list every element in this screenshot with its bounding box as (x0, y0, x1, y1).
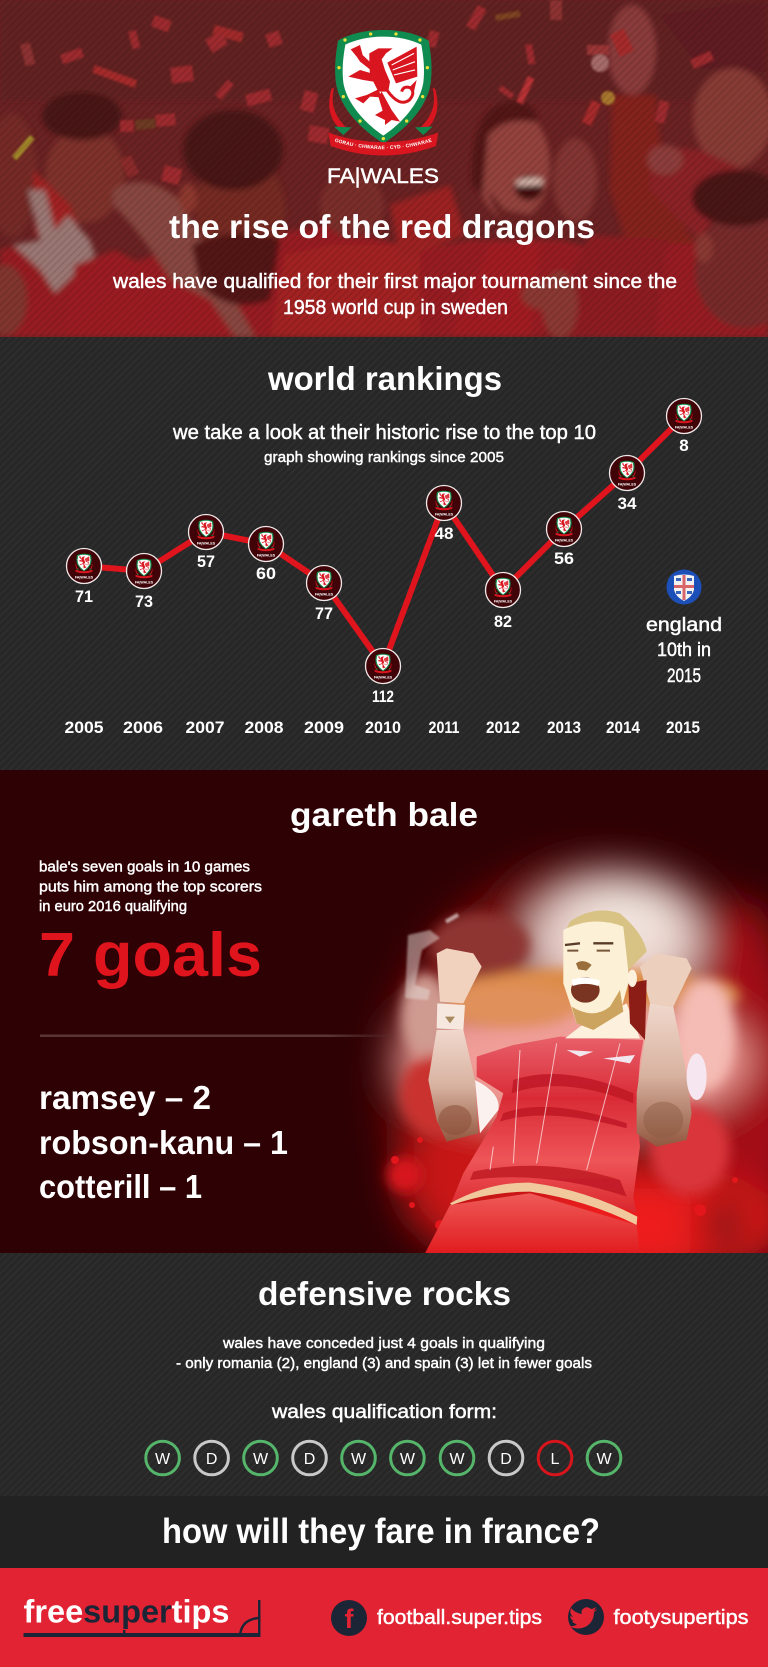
confetti (20, 0, 714, 185)
node 2012: FA|WALES (494, 600, 513, 604)
brand: FA|WALES: FA|WALES (327, 165, 439, 188)
node 2014 (610, 456, 644, 490)
node 2006: FA|WALES (135, 580, 154, 584)
panel: gareth bale (0, 770, 768, 1253)
form badges: W (596, 1451, 612, 1468)
neck and head (565, 1003, 640, 1038)
fine diagonal texture (0, 0, 768, 337)
node 2008: FA|WALES (257, 554, 276, 558)
node 2011 (426, 486, 462, 520)
right arm (637, 1003, 692, 1147)
ranking values (75, 436, 689, 706)
description (39, 858, 262, 915)
ranking values: 34 (618, 494, 637, 513)
node 2014: FA|WALES (618, 482, 637, 486)
shirt (452, 1037, 643, 1213)
england note: 2015 (667, 666, 701, 687)
node 2005 (66, 548, 102, 584)
intro text: we take a look at their historic rise to the top 10 (172, 422, 596, 444)
node 2015: FA|WALES (675, 426, 694, 430)
year axis labels: 2009 (304, 718, 344, 737)
icon: facebook: f (344, 1604, 354, 1634)
description: in euro 2016 qualifying (39, 898, 187, 915)
node 2010: FA|WALES (374, 676, 393, 680)
other scorers: ramsey – 2 (39, 1079, 211, 1116)
year axis labels (64, 718, 700, 737)
form badges: D (304, 1451, 315, 1468)
title: the rise of the red dragons (169, 208, 595, 245)
form badges: W (400, 1451, 416, 1468)
shorts (423, 1193, 640, 1257)
other scorers: cotterill – 1 (39, 1168, 202, 1205)
facebook address: football.super.tips (377, 1607, 542, 1629)
node 2013 (546, 512, 582, 546)
year axis labels: 2005 (64, 718, 104, 737)
photo: blurred players and jerseys (0, 0, 768, 339)
crest: FA Wales (328, 30, 438, 156)
form heading: wales qualification form: (271, 1402, 497, 1423)
subtitle: wales have qualified for their first major tournament since the (112, 271, 677, 293)
waistband (450, 1183, 637, 1225)
heading: defensive rocks: defensive rocks (258, 1275, 511, 1312)
node 2013: FA|WALES (555, 538, 574, 542)
node 2008 (248, 526, 284, 562)
node 2012 (486, 572, 520, 608)
node 2006 (126, 554, 162, 588)
year axis labels: 2015 (666, 718, 700, 737)
ranking values: 8 (679, 436, 689, 455)
form badges: W (155, 1451, 171, 1468)
node 2007: FA|WALES (197, 542, 216, 546)
node 2011: FA|WALES (435, 512, 454, 516)
subtitle: 1958 world cup in sweden (283, 297, 508, 319)
heading: world rankings: world rankings (267, 360, 502, 397)
panel: world rankings (0, 337, 768, 770)
node 2009 (306, 566, 342, 600)
england note (646, 615, 722, 687)
panel: closing question: how will they fare in france? (162, 1512, 600, 1551)
year axis labels: 2014 (606, 718, 640, 737)
node 2005: FA|WALES (75, 576, 94, 580)
ranking values: 56 (554, 549, 574, 568)
year axis labels: 2008 (244, 718, 284, 737)
description: wales have conceded just 4 goals in qualifying (222, 1335, 545, 1352)
node 2015 (666, 398, 702, 434)
year axis labels: 2012 (486, 718, 520, 737)
other scorers: robson-kanu – 1 (39, 1124, 288, 1161)
ranking values: 60 (256, 564, 276, 583)
other scorers (40, 1086, 288, 1198)
crest: FA Wales: GORAU · CHWARAE · CYD · CHWARAE (335, 138, 432, 150)
icon: england crest (666, 570, 702, 604)
ranking values: 82 (494, 612, 512, 631)
year axis labels: 2013 (547, 718, 581, 737)
england note: 10th in (657, 640, 711, 661)
year axis labels: 2011 (428, 718, 460, 737)
left arm (475, 1080, 499, 1133)
form badges: W (253, 1451, 269, 1468)
graph caption: graph showing rankings since 2005 (264, 449, 504, 466)
year axis labels: 2006 (123, 718, 163, 737)
big stat: 7 goals: 7 goals (39, 921, 262, 990)
node 2007 (188, 514, 224, 550)
node 2009: FA|WALES (315, 592, 334, 596)
ranking values: 73 (135, 592, 153, 611)
node 2010 (366, 648, 400, 684)
form badges (146, 1441, 621, 1475)
logo: freesupertips: freesupertips (24, 1594, 230, 1630)
form badges: D (500, 1451, 512, 1468)
icon: twitter (568, 1599, 604, 1635)
subtitle (112, 271, 677, 319)
england note: england (646, 615, 722, 636)
ranking values: 71 (75, 587, 93, 606)
form badges: W (449, 1451, 465, 1468)
year axis labels: 2007 (186, 718, 224, 737)
ranking values: 112 (372, 687, 394, 706)
description (176, 1335, 592, 1372)
panel: header with celebrating team photo (0, 0, 768, 337)
description: bale's seven goals in 10 games (39, 858, 250, 876)
heading: gareth bale: gareth bale (290, 796, 478, 833)
form badges: L (551, 1451, 560, 1468)
form badges: D (206, 1451, 217, 1468)
year axis labels: 2010 (365, 718, 401, 737)
ranking values: 57 (197, 552, 215, 571)
icon: facebook (331, 1600, 367, 1636)
form badges: W (351, 1451, 367, 1468)
panel: footer (0, 1568, 768, 1667)
ranking values: 48 (434, 524, 454, 543)
panel: defensive rocks (0, 1253, 768, 1496)
ranking values: 77 (315, 604, 333, 623)
description: puts him among the top scorers (39, 878, 262, 896)
photo: gareth bale celebrating (385, 860, 768, 1310)
description: - only romania (2), england (3) and spain (3) let in fewer goals (176, 1355, 592, 1372)
twitter handle: footysupertips (614, 1607, 748, 1629)
panel: closing question (0, 1496, 768, 1568)
line chart: rankings since 2005 (66, 398, 702, 684)
